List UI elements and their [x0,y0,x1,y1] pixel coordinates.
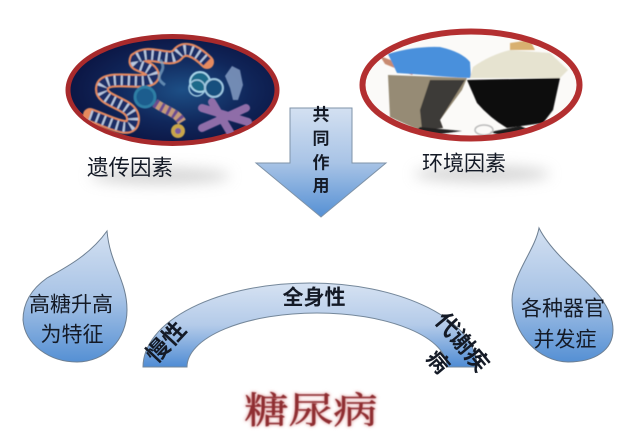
panel: genetic factors [66,34,280,184]
drop text [29,294,113,346]
arc label: chronic: 慢性 [141,316,191,368]
title: 糖尿病 [244,391,378,431]
title: 糖尿病 [244,391,378,431]
arc label: metabolic disease: 代谢疾 [430,307,494,377]
drop: high blood sugar [23,231,127,362]
arrow text: 作 [312,154,330,172]
arc label: metabolic disease: 病 [421,346,455,378]
arrow text: 同 [312,130,330,148]
arrow text [312,106,330,196]
image: DNA oval [66,34,280,146]
arrow text: 用 [312,176,330,196]
label shadow: genetic factors [90,168,230,184]
drop text: 各种器官 [521,298,605,320]
drop text: 为特征 [40,324,104,346]
arrow: combined action [256,106,386,217]
arc label: systemic: 全身性 [282,286,346,310]
panel: environmental factors [362,32,580,182]
arrow text: 共 [312,106,330,124]
drop text [521,298,605,352]
label shadow: environmental factors [414,166,550,182]
arc: disease characteristics [141,283,494,378]
label: environmental factors: 环境因素 [422,152,506,176]
image: overweight people oval [362,32,580,138]
drop: organ complications [512,228,613,362]
label: genetic factors: 遗传因素 [87,156,173,180]
drop text: 并发症 [534,328,596,352]
drop text: 高糖升高 [29,294,113,316]
